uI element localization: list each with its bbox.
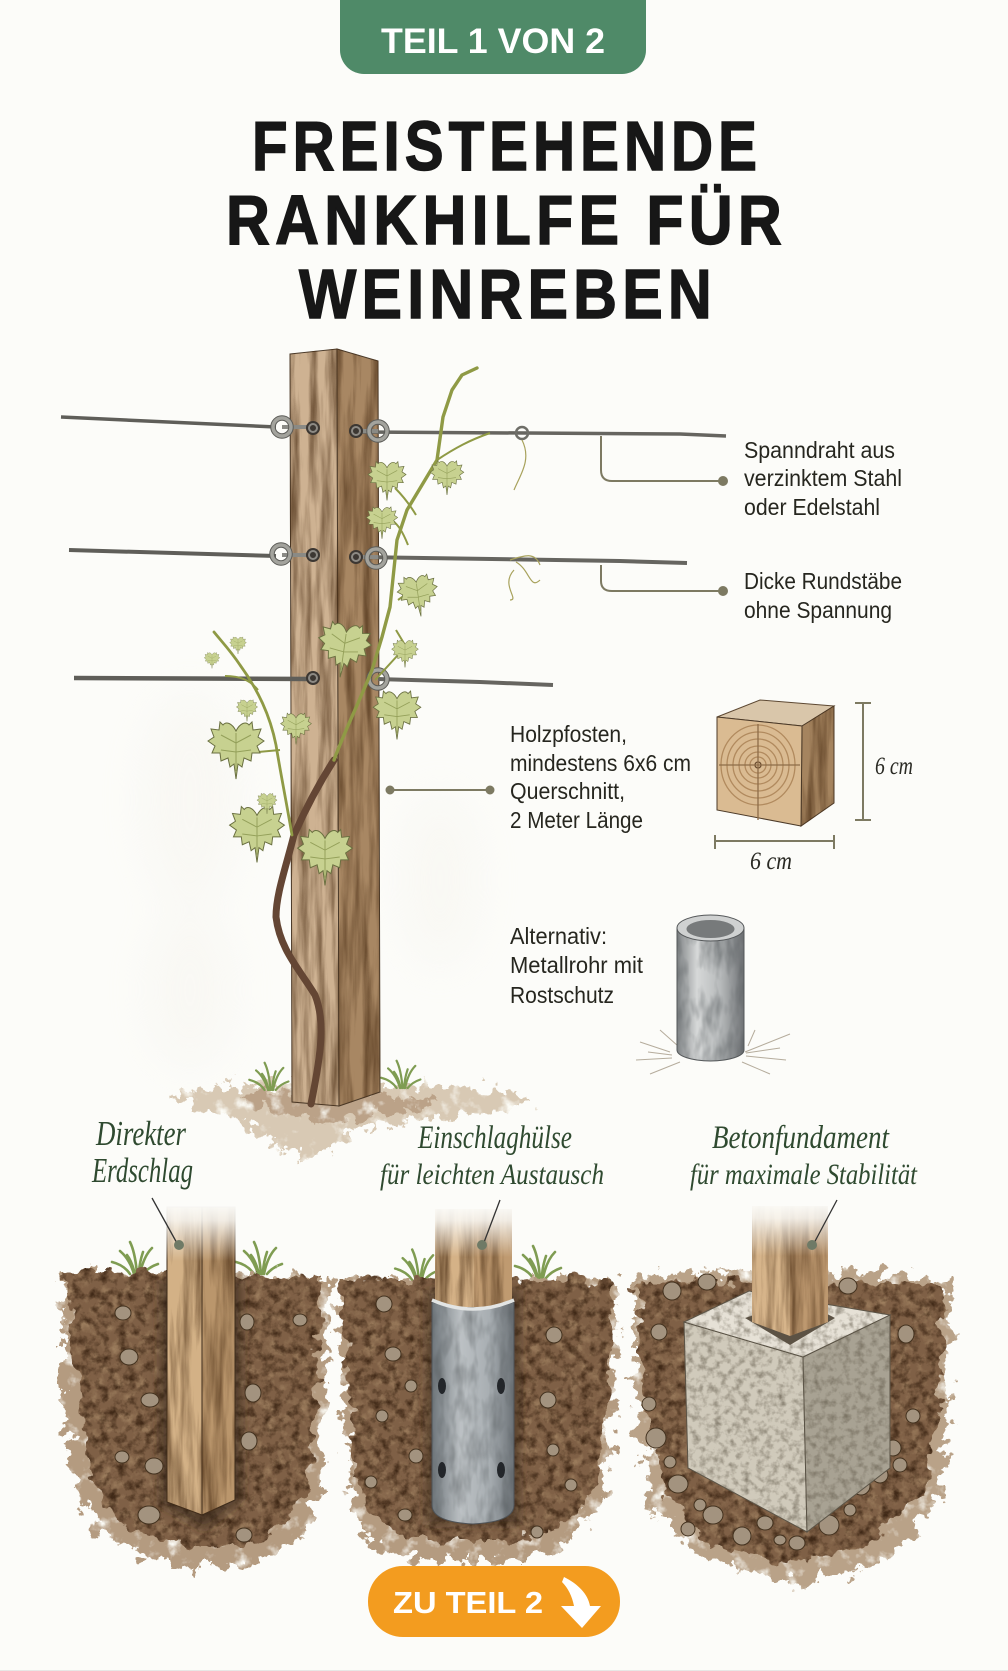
- text: Rundstäbe: ohne Spannung: [744, 597, 892, 623]
- connector: wire label: [601, 436, 727, 485]
- soil: [342, 1279, 612, 1540]
- pointer: [477, 1200, 500, 1250]
- panel: direct ground driving: [62, 1198, 328, 1566]
- text: Spanndraht: oder Edelstahl: [744, 494, 880, 520]
- icon: wood cross-section cube: [717, 700, 834, 826]
- panel: concrete foundation: [636, 1200, 950, 1585]
- text: Spanndraht: [744, 437, 902, 520]
- concrete block: [684, 1291, 890, 1532]
- text: Holzpfosten: mindestens 6x6 cm: [510, 750, 691, 776]
- label: Einschlaghülse: [380, 1120, 604, 1191]
- label: Betonfundament: für maximale Stabilität: [690, 1158, 918, 1191]
- text: Spanndraht: Spanndraht aus: [744, 437, 895, 463]
- label: Direkter Erdschlag: [91, 1114, 193, 1190]
- title: WEINREBEN: [299, 255, 717, 333]
- text: Holzpfosten: [510, 721, 691, 833]
- connector: post label: [386, 786, 494, 794]
- badge: Teil 1 von 2: TEIL 1 VON 2: [381, 22, 605, 61]
- label: Betonfundament: [690, 1120, 918, 1191]
- panel: driven sleeve: [340, 1200, 615, 1560]
- button: Zu Teil 2: [368, 1566, 620, 1637]
- text: Alternativ: Alternativ:: [510, 923, 607, 949]
- dimension: height 6 cm: 6 cm: [875, 753, 913, 780]
- pointer: [152, 1198, 184, 1250]
- post in concrete: [750, 1202, 830, 1336]
- label: Einschlaghülse: Einschlaghülse: [417, 1120, 572, 1156]
- text: Holzpfosten: 2 Meter Länge: [510, 807, 643, 833]
- icon: arrow: [561, 1577, 601, 1628]
- stones: [642, 1274, 920, 1550]
- pointer: [807, 1200, 837, 1250]
- text: Holzpfosten: Holzpfosten,: [510, 721, 627, 747]
- title: RANKHILFE FÜR: [226, 181, 787, 259]
- label: Betonfundament: Betonfundament: [712, 1120, 890, 1156]
- text: Alternativ: [510, 923, 644, 1008]
- label: Einschlaghülse: für leichten Austausch: [380, 1158, 604, 1191]
- vine: [204, 368, 540, 1104]
- title: FREISTEHENDE: [252, 107, 762, 185]
- post in ground: [165, 1203, 237, 1515]
- text: Alternativ: Rostschutz: [510, 982, 614, 1008]
- top wires left of post: [61, 417, 276, 556]
- text: Alternativ: Metallrohr mit: [510, 952, 644, 978]
- text: Holzpfosten: Querschnitt,: [510, 778, 625, 804]
- button: Zu Teil 2: ZU TEIL 2: [393, 1585, 543, 1620]
- dimension: width 6 cm: [715, 835, 834, 875]
- dimension: width 6 cm: 6 cm: [750, 848, 792, 875]
- dimension: height 6 cm: [855, 703, 913, 820]
- title: [226, 107, 787, 333]
- wires and eyelets on the post: [74, 418, 726, 688]
- label: Direkter Erdschlag: Erdschlag: [91, 1151, 193, 1190]
- icon: metal tube: [636, 915, 790, 1074]
- connector: round bar label: [601, 565, 727, 595]
- soil: [66, 1272, 320, 1545]
- stones: [115, 1306, 307, 1542]
- text: Spanndraht: verzinktem Stahl: [744, 465, 902, 491]
- ground mound below post: [170, 1061, 535, 1156]
- metal sleeve: [432, 1300, 514, 1524]
- text: Rundstäbe: [744, 568, 902, 623]
- badge: Teil 1 von 2: [340, 0, 646, 74]
- post in sleeve: [433, 1205, 514, 1307]
- stones: [365, 1296, 577, 1538]
- soil: [636, 1282, 946, 1565]
- text: Rundstäbe: Dicke Rundstäbe: [744, 568, 902, 594]
- label: Direkter Erdschlag: Direkter: [95, 1114, 186, 1153]
- wooden post: [290, 349, 380, 1106]
